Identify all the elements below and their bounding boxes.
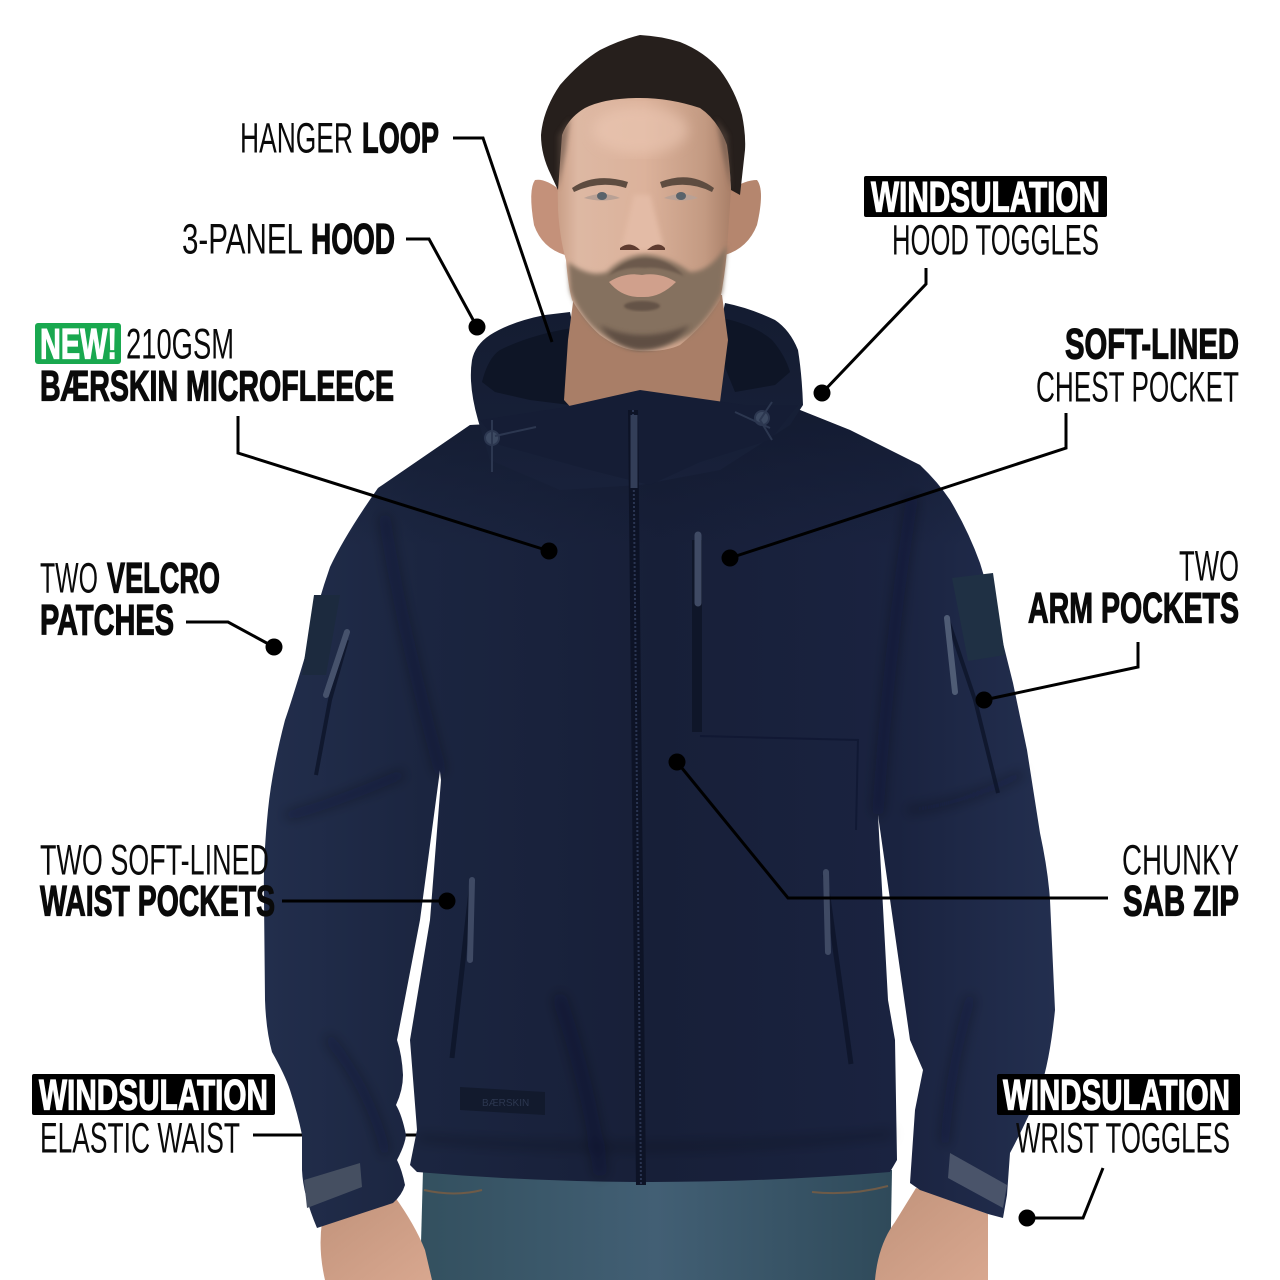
jeans	[420, 1170, 892, 1280]
right hood toggle	[735, 402, 772, 440]
right hand	[875, 1188, 988, 1280]
leader line: elastic waist (passes behind figure)	[253, 1134, 420, 1136]
face	[557, 95, 731, 351]
left arm pocket	[316, 632, 347, 775]
callout: windsulation hood toggles	[814, 174, 1107, 402]
right waist pocket	[825, 872, 851, 1064]
callout: windsulation elastic waist: WINDSULATION	[39, 1072, 268, 1120]
head	[531, 35, 761, 351]
nose	[622, 195, 663, 250]
hood inner left	[482, 328, 572, 405]
hood	[471, 295, 803, 490]
brand label patch	[460, 1087, 545, 1115]
lips	[609, 274, 676, 297]
callout: two soft-lined waist pockets	[40, 836, 456, 926]
hair	[541, 35, 745, 195]
right ear	[725, 180, 761, 255]
right arm pocket	[947, 618, 998, 793]
left ear	[531, 180, 565, 255]
callout: hanger loop: HANGER	[240, 114, 353, 162]
callout: two arm pockets: TWO	[1179, 542, 1239, 590]
callout: windsulation hood toggles: WINDSULATION	[871, 174, 1100, 222]
left eye	[584, 192, 620, 200]
beard	[568, 245, 727, 350]
left waist pocket	[452, 880, 472, 1058]
brand label patch: BÆRSKIN	[482, 1098, 529, 1109]
hair fade shadow	[558, 118, 731, 190]
callout: hanger loop: LOOP	[362, 114, 439, 162]
center zip	[633, 410, 641, 1185]
left hand	[321, 1197, 432, 1280]
jacket body and sleeves	[264, 410, 1055, 1228]
callout: two velcro patches	[40, 554, 282, 656]
callout: two soft-lined waist pockets: TWO SOFT-LINED	[40, 836, 269, 884]
right wrist tab	[948, 1153, 1007, 1208]
right velcro patch	[952, 573, 1005, 661]
hood inner right	[718, 318, 790, 392]
callout: two soft-lined waist pockets: WAIST POCKETS	[40, 878, 275, 926]
hood outer shell	[471, 303, 803, 490]
callout: new 210gsm baerskin microfleece	[35, 320, 558, 560]
nostrils	[620, 244, 665, 250]
chin patch	[624, 301, 660, 311]
callout: windsulation hood toggles: HOOD TOGGLES	[892, 216, 1099, 264]
neck	[564, 295, 728, 412]
right eyebrow	[660, 177, 714, 192]
callout: new 210gsm baerskin microfleece: NEW!	[40, 320, 117, 368]
callout: windsulation elastic waist	[32, 1072, 275, 1162]
jacket torso	[378, 410, 920, 1182]
left hood toggle	[485, 420, 536, 472]
chest pocket seam	[700, 736, 858, 830]
center zip puller	[630, 415, 638, 488]
chin beard shadow	[600, 325, 690, 350]
callout: windsulation wrist toggles	[997, 1072, 1240, 1226]
callout: two velcro patches: PATCHES	[40, 596, 174, 644]
right eye	[664, 192, 698, 200]
mustache	[608, 258, 684, 276]
callout: 3-panel hood	[182, 216, 486, 336]
jacket top shading	[330, 410, 980, 800]
chest pocket	[697, 535, 858, 830]
jacket left sleeve	[264, 488, 450, 1228]
left wrist tab	[304, 1163, 362, 1208]
callout: chunky sab zip	[668, 754, 1239, 926]
callout: 3-panel hood: HOOD	[311, 216, 395, 264]
forehead highlight	[592, 106, 688, 154]
callout: two velcro patches: TWO	[40, 554, 98, 602]
chest zip puller	[694, 535, 702, 603]
figure: man wearing navy fleece jacket	[264, 35, 1055, 1280]
callout: new 210gsm baerskin microfleece: BÆRSKIN MICROFLEECE	[40, 362, 394, 410]
callout: windsulation elastic waist: ELASTIC WAIST	[40, 1114, 240, 1162]
jacket folds and shading	[290, 500, 1020, 1170]
callout: two velcro patches: VELCRO	[107, 554, 220, 602]
jacket right sleeve	[860, 465, 1055, 1218]
callout: two arm pockets	[976, 542, 1239, 708]
jeans pockets	[424, 1186, 888, 1194]
left velcro patch	[302, 595, 340, 675]
callout: 3-panel hood: 3-PANEL	[182, 216, 303, 264]
callout: new 210gsm baerskin microfleece: 210GSM	[126, 320, 234, 368]
callout: hanger loop	[240, 114, 552, 342]
callout: soft-lined chest pocket	[722, 320, 1239, 566]
collar front	[480, 390, 798, 485]
left eyebrow	[572, 178, 628, 192]
